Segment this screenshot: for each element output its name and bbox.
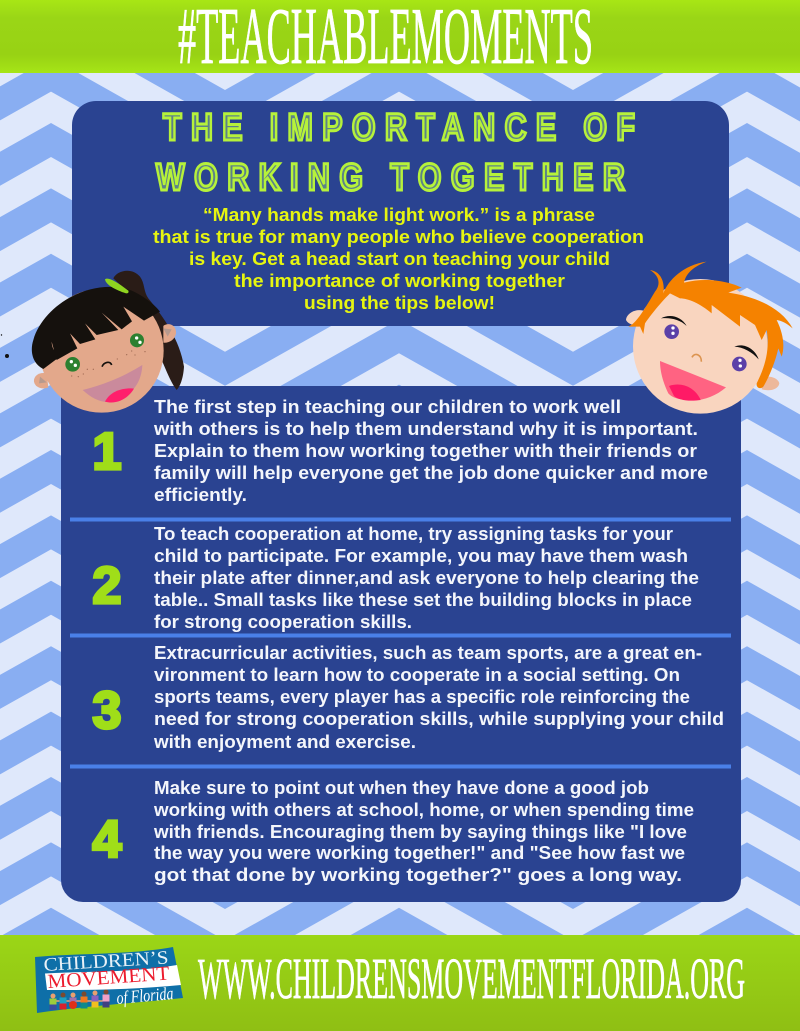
intro quote text	[153, 205, 644, 313]
tip 1: The first step in teaching our children to work well	[154, 397, 621, 417]
heading	[156, 107, 635, 199]
tip 4: got that done by working together?" goes a long way.	[154, 865, 682, 885]
tip 2: 2	[93, 557, 121, 615]
tip 1: family will help everyone get the job done quicker and more	[154, 463, 708, 483]
intro quote text: “Many hands make light work.” is a phrase	[203, 205, 595, 225]
heading: WORKING TOGETHER	[156, 157, 625, 199]
tip 3: with enjoyment and exercise.	[153, 732, 416, 752]
panel: introduction	[72, 101, 729, 326]
stray dots	[1, 334, 9, 358]
panel: tips	[61, 386, 741, 902]
tip 3: Extracurricular activities, such as team sports, are a great en-	[154, 643, 702, 663]
tip 3: vironment to learn how to cooperate in a social setting. On	[154, 665, 680, 685]
header bar	[0, 0, 800, 81]
footer bar	[0, 935, 800, 1031]
tip 1: 1	[93, 423, 121, 481]
logo: Children's Movement of Florida	[35, 947, 183, 1013]
tip 1	[93, 397, 708, 505]
tip 4: the way you were working together!" and "See how fast we	[154, 843, 685, 863]
tip 3: need for strong cooperation skills, while supplying your child	[154, 709, 724, 729]
tip 2	[93, 524, 699, 632]
logo: Children's Movement of Florida: MOVEMENT	[47, 963, 170, 993]
intro quote text: is key. Get a head start on teaching your child	[189, 249, 610, 269]
tip 2: child to participate. For example, you may have them wash	[154, 546, 688, 566]
tip 3: sports teams, every player has a specific role reinforcing the	[154, 687, 690, 707]
logo: Children's Movement of Florida: of Florida	[116, 983, 174, 1008]
tip 1: Explain to them how working together with their friends or	[154, 441, 697, 461]
tip 4: Make sure to point out when they have done a good job	[154, 778, 649, 798]
intro quote text: the importance of working together	[234, 271, 565, 291]
heading: THE IMPORTANCE OF	[163, 107, 635, 149]
illustration: girl	[32, 271, 184, 413]
tip 2: To teach cooperation at home, try assigning tasks for your	[154, 524, 673, 544]
tip 4: 4	[93, 811, 122, 869]
illustration: boy	[626, 262, 793, 414]
tip 1: efficiently.	[154, 485, 247, 505]
tip 2: their plate after dinner,and ask everyone to help clearing the	[154, 568, 699, 588]
tip 1: with others is to help them understand why it is important.	[153, 419, 698, 439]
tip 4: working with others at school, home, or when spending time	[153, 800, 694, 820]
intro quote text: using the tips below!	[304, 293, 495, 313]
tip 3	[93, 643, 724, 752]
tip 2: table.. Small tasks like these set the building blocks in place	[154, 590, 692, 610]
tip 4	[93, 778, 694, 885]
logo: Children's Movement of Florida: CHILDREN’S	[43, 947, 169, 976]
tip 3: 3	[93, 682, 121, 740]
tip 4: with friends. Encouraging them by saying things like "I love	[153, 822, 687, 842]
tip 2: for strong cooperation skills.	[154, 612, 412, 632]
intro quote text: that is true for many people who believe cooperation	[153, 227, 644, 247]
